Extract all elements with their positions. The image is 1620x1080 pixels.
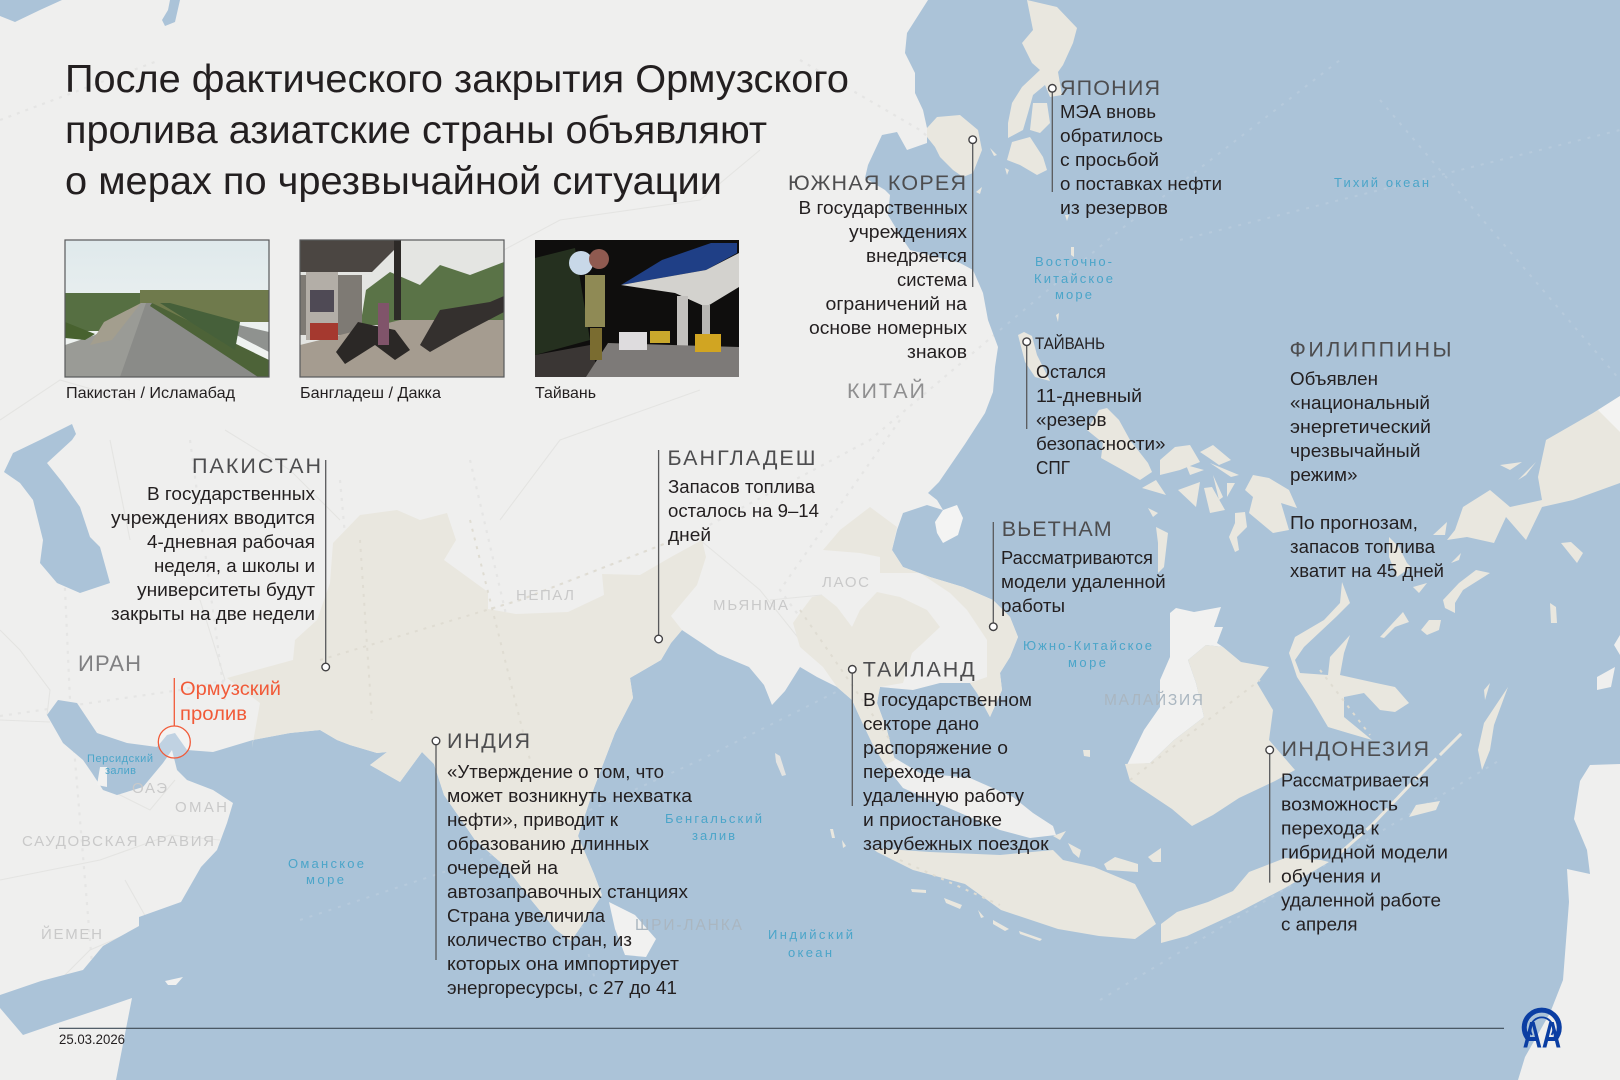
map labels: seas: Оманское [288,856,364,871]
photo: Taiwan [535,240,739,377]
panel: India: «Утверждение о том, что [447,761,664,782]
Sumatra [872,848,1156,939]
lakes [0,0,180,593]
big eastern land [1447,396,1620,543]
map labels: countries: МЬЯНМА [713,597,788,614]
map labels: seas: море [306,872,344,887]
title: о мерах по чрезвычайной ситуации [65,160,722,203]
panel: Bangladesh: БАНГЛАДЕШ [668,446,816,470]
panel: Thailand: зарубежных поездок [863,833,1050,854]
panel: Japan: из резервов [1060,197,1168,218]
panel: Thailand [848,658,1050,854]
map labels: countries: НЕПАЛ [516,587,574,604]
callout: Strait of Hormuz: Ормузский [180,679,281,700]
map labels: seas: Индийский [768,927,853,942]
Java and eastern arc [1161,801,1440,943]
panel: Vietnam: модели удаленной [1001,571,1166,592]
faint sea graticule [300,60,1620,1000]
panel: Pakistan: учреждениях вводится [111,507,315,528]
panel: Japan: МЭА вновь [1060,101,1156,122]
panel: South Korea: ограничений на [826,293,968,314]
panel: Indonesia: возможность [1281,794,1398,814]
panel: Thailand: удаленную работу [863,785,1025,806]
photo captions: Бангладеш / Дакка [300,385,441,402]
panel: South Korea: ЮЖНАЯ КОРЕЯ [788,171,966,195]
panel: India: нефти», приводит к [447,809,619,830]
panel: India: автозаправочных станциях [447,881,689,902]
panel: India [432,729,693,998]
panel: South Korea: система [897,269,968,290]
panel: Pakistan: университеты будут [137,579,316,600]
panel: Vietnam: Рассматриваются [1001,547,1153,568]
map labels: seas: море [1055,287,1092,302]
photo: Bangladesh, Dhaka [300,240,504,377]
panel: Taiwan: СПГ [1036,457,1070,478]
photo captions: Пакистан / Исламабад [66,385,236,402]
panel: Bangladesh [655,446,819,643]
Korea [927,115,982,177]
Thailand [793,592,940,765]
panel: Bangladesh: Запасов топлива [668,476,816,497]
panel: Taiwan [1023,334,1166,478]
panel: Philippines: По прогнозам, [1290,512,1418,533]
panel: Pakistan: В государственных [147,483,316,504]
panel: Japan: о поставках нефти [1060,173,1222,194]
Japan [976,0,1077,322]
panel: Taiwan: Остался [1036,361,1106,382]
map labels: seas: Персидский [87,753,153,765]
panel: India: количество стран, из [447,929,632,950]
icon: AA logo: AA [1523,1015,1561,1056]
panel: Philippines: «национальный [1290,392,1430,413]
panel: South Korea [788,136,976,362]
panel: Thailand: ТАИЛАНД [863,658,975,682]
panel: Philippines: энергетический [1290,416,1431,437]
panel: Pakistan: 4-дневная рабочая [147,531,315,552]
map labels: countries: ОМАН [175,799,227,816]
panel: Indonesia: удаленной работе [1281,890,1441,910]
panel: Pakistan: закрыты на две недели [111,603,315,624]
panel: Japan: обратилось [1060,125,1163,146]
panel: Philippines [1290,338,1452,581]
photo: Pakistan, Islamabad [65,240,269,377]
panel: Philippines: Объявлен [1290,368,1378,389]
Philippines [1087,408,1297,573]
panel: South Korea: знаков [907,341,967,362]
panel: Philippines: запасов топлива [1290,536,1436,557]
Borneo Malaysia part [1127,607,1223,765]
panel: India: ИНДИЯ [447,729,530,753]
panel: India: может возникнуть нехватка [447,785,693,806]
panel: South Korea: В государственных [798,197,968,218]
panel: Indonesia: перехода к [1281,818,1380,838]
Taiwan [1018,332,1050,381]
panel: South Korea: основе номерных [809,317,968,338]
Sulawesi [1289,582,1409,740]
map labels: seas: Китайское [1034,271,1113,286]
map labels: countries: ИРАН [78,651,141,676]
map labels: countries: ЙЕМЕН [41,925,102,943]
Hainan [935,505,963,543]
map labels: countries: КИТАЙ [847,378,925,403]
title: пролива азиатские страны объявляют [65,109,767,152]
map labels: countries [22,378,1203,943]
panel: Thailand: В государственном [863,689,1032,710]
footer rule and date: 25.03.2026 [59,1032,125,1047]
panel: Pakistan: неделя, а школы и [154,555,315,576]
small islands [830,462,1583,941]
map labels: countries: ШРИ-ЛАНКА [635,917,743,934]
Australia [1518,635,1620,1080]
dashes over highlighted land [320,520,1370,905]
panel: Vietnam: работы [1001,595,1065,616]
panel: South Korea: внедряется [866,245,967,266]
panel: India: которых она импортирует [447,953,680,974]
panel: India: энергоресурсы, с 27 до 41 [447,977,677,998]
panel: Taiwan: «резерв [1036,409,1107,430]
panel: Pakistan [111,454,330,671]
panel: Taiwan: безопасности» [1036,433,1166,454]
map labels: seas: Южно-Китайское [1023,638,1152,653]
panel: Taiwan: 11-дневный [1036,385,1142,406]
panel: Indonesia: обучения и [1281,866,1381,886]
map labels: seas [87,175,1429,960]
title [65,58,849,203]
map labels: countries: САУДОВСКАЯ АРАВИЯ [22,833,214,850]
Halmahera long island [1478,687,1508,770]
panel: Vietnam [990,517,1166,630]
panel: Philippines: хватит на 45 дней [1290,560,1444,581]
panel: Indonesia: гибридной модели [1281,842,1448,862]
icon: AA logo [1523,1010,1561,1056]
panel: South Korea: учреждениях [849,221,968,242]
panel: Bangladesh: дней [668,524,711,545]
map labels: seas: океан [788,945,832,960]
panel: Thailand: распоряжение о [863,737,1008,758]
panel: Indonesia: Рассматривается [1281,770,1429,790]
map labels: countries: ОАЭ [132,780,167,797]
panel: India: Страна увеличила [447,905,606,926]
panel: Indonesia [1266,737,1448,934]
panel: Bangladesh: осталось на 9–14 [668,500,819,521]
panel: Taiwan: ТАЙВАНЬ [1035,334,1105,353]
photo captions: Тайвань [535,385,596,402]
photo captions [66,385,596,402]
panel: India: образованию длинных [447,833,650,854]
panel: India: очередей на [447,857,559,878]
panel: Thailand: и приостановке [863,809,1002,830]
map labels: seas: Восточно- [1035,254,1112,269]
panel: Indonesia: с апреля [1281,914,1358,934]
panel: Japan: с просьбой [1060,149,1159,170]
map labels: seas: залив [105,765,136,777]
map labels: seas: Тихий океан [1334,175,1429,190]
map labels: countries: МАЛАЙЗИЯ [1104,691,1203,709]
Borneo Indonesia part [1125,645,1295,826]
panel: Japan: ЯПОНИЯ [1060,76,1160,100]
callout: Strait of Hormuz: пролив [180,704,247,725]
Pakistan and India [227,510,706,941]
panel: Philippines: режим» [1290,464,1358,485]
panel: Thailand: переходе на [863,761,972,782]
panel: Thailand: секторе дано [863,713,979,734]
land graticule and borders [0,60,1000,1000]
Qatar, Socotra, Sri Lanka [97,767,656,985]
panel: Japan [1048,76,1222,218]
map labels: seas: море [1068,655,1106,670]
panel: Philippines: чрезвычайный [1290,440,1420,461]
panel: Vietnam: ВЬЕТНАМ [1002,517,1112,541]
panel: Indonesia: ИНДОНЕЗИЯ [1282,737,1429,761]
panel: Pakistan: ПАКИСТАН [192,454,321,478]
Vietnam [823,507,1018,717]
title: После фактического закрытия Ормузского [65,58,849,101]
callout: Strait of Hormuz [158,678,281,758]
map labels: countries: ЛАОС [822,574,869,591]
map labels: seas: залив [692,828,735,843]
map labels: seas: Бенгальский [665,811,762,826]
panel: Philippines: ФИЛИППИНЫ [1290,338,1452,362]
